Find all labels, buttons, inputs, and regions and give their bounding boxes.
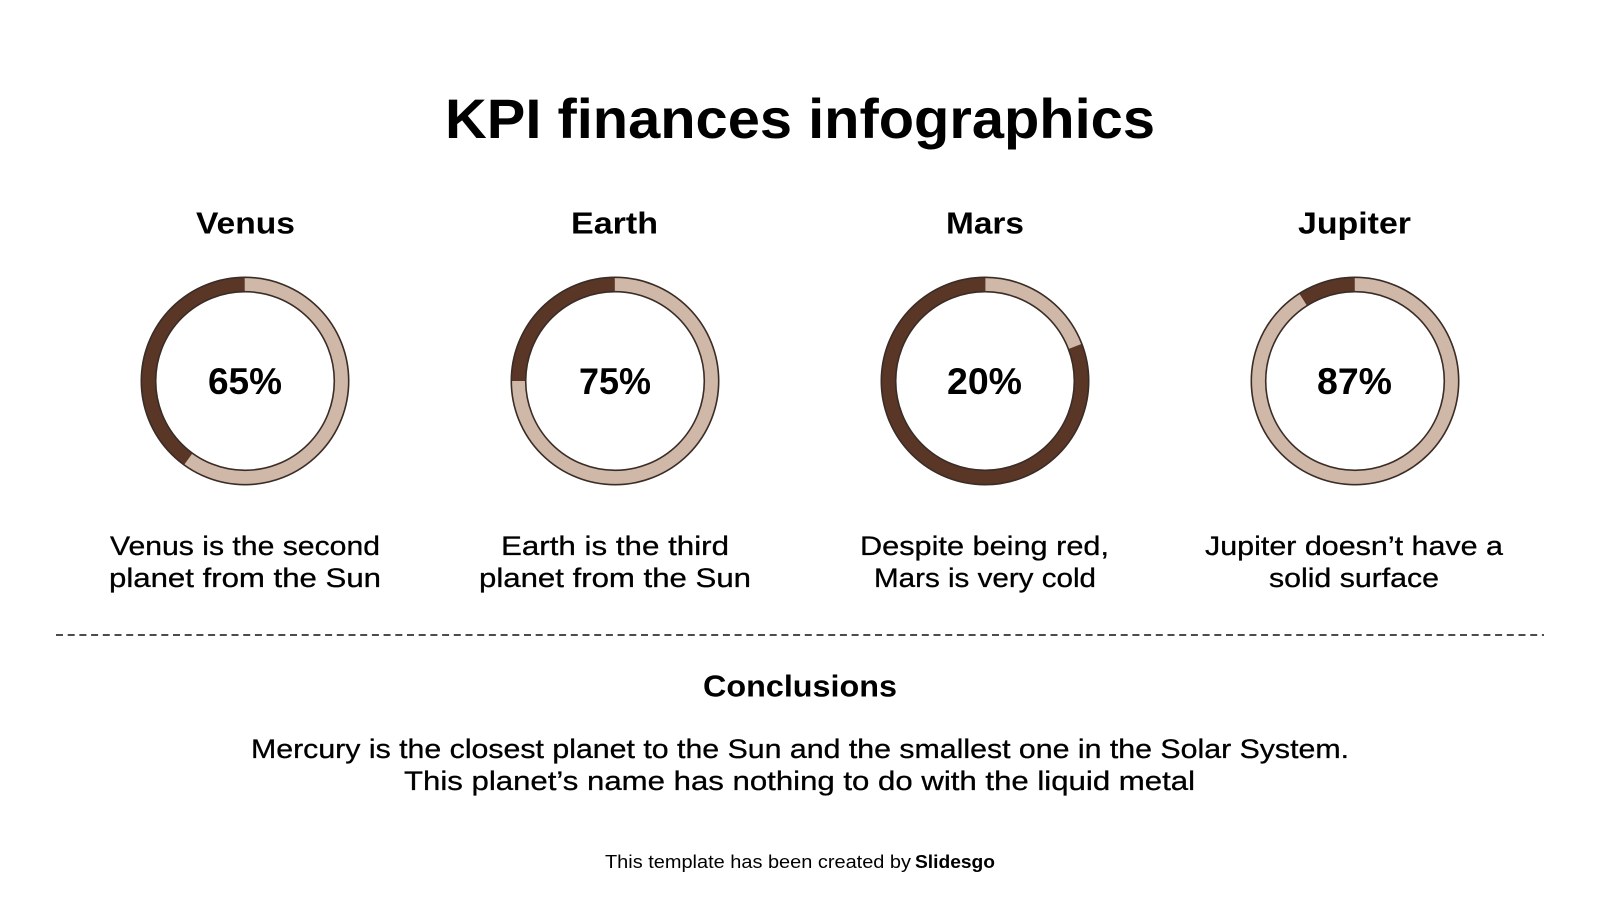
description: Venus bbox=[109, 531, 381, 593]
heading: Venus: Venus bbox=[196, 206, 295, 240]
panel: Mars bbox=[860, 206, 1110, 593]
description: Venus: planet from the Sun bbox=[109, 563, 381, 593]
title: KPI finances infographics bbox=[445, 87, 1155, 150]
description: Jupiter: solid surface bbox=[1269, 563, 1439, 593]
description: Venus: Venus is the second bbox=[110, 531, 380, 561]
donut chart: Earth 75% bbox=[511, 277, 719, 485]
heading: Earth: Earth bbox=[571, 206, 658, 240]
value: 20%: 20% bbox=[947, 361, 1022, 402]
donut chart: Venus 65% bbox=[110, 246, 380, 516]
value: 75%: 75% bbox=[579, 361, 651, 402]
description: Jupiter: Jupiter doesn’t have a bbox=[1205, 531, 1504, 561]
heading: Jupiter: Jupiter bbox=[1298, 206, 1411, 240]
description: Earth bbox=[479, 531, 751, 593]
text block: conclusions: This planet’s name has nothing to do with the liquid metal bbox=[404, 766, 1195, 796]
text block: conclusions bbox=[251, 734, 1349, 796]
value: 87%: 87% bbox=[1317, 361, 1392, 402]
description: Earth: Earth is the third bbox=[501, 531, 729, 561]
description: Mars: Mars is very cold bbox=[874, 563, 1096, 593]
description: Jupiter bbox=[1205, 531, 1504, 593]
description: Mars bbox=[860, 531, 1109, 593]
donut chart: Mars 20% bbox=[860, 256, 1110, 506]
description: Earth: planet from the Sun bbox=[479, 563, 751, 593]
panel: Venus bbox=[109, 206, 381, 593]
footer credit: Slidesgo bbox=[915, 852, 995, 872]
footer credit: This template has been created by bbox=[605, 852, 911, 872]
heading: Mars: Mars bbox=[946, 206, 1024, 240]
text block: conclusions: Mercury is the closest planet to the Sun and the smallest one in the Solar System. bbox=[251, 734, 1349, 764]
value: 65%: 65% bbox=[208, 361, 282, 402]
description: Mars: Despite being red, bbox=[860, 531, 1109, 561]
donut chart: Jupiter 87% bbox=[1222, 248, 1488, 514]
panel: Jupiter bbox=[1205, 206, 1504, 593]
panel: Earth bbox=[479, 206, 751, 593]
heading: Conclusions: Conclusions bbox=[703, 668, 897, 704]
